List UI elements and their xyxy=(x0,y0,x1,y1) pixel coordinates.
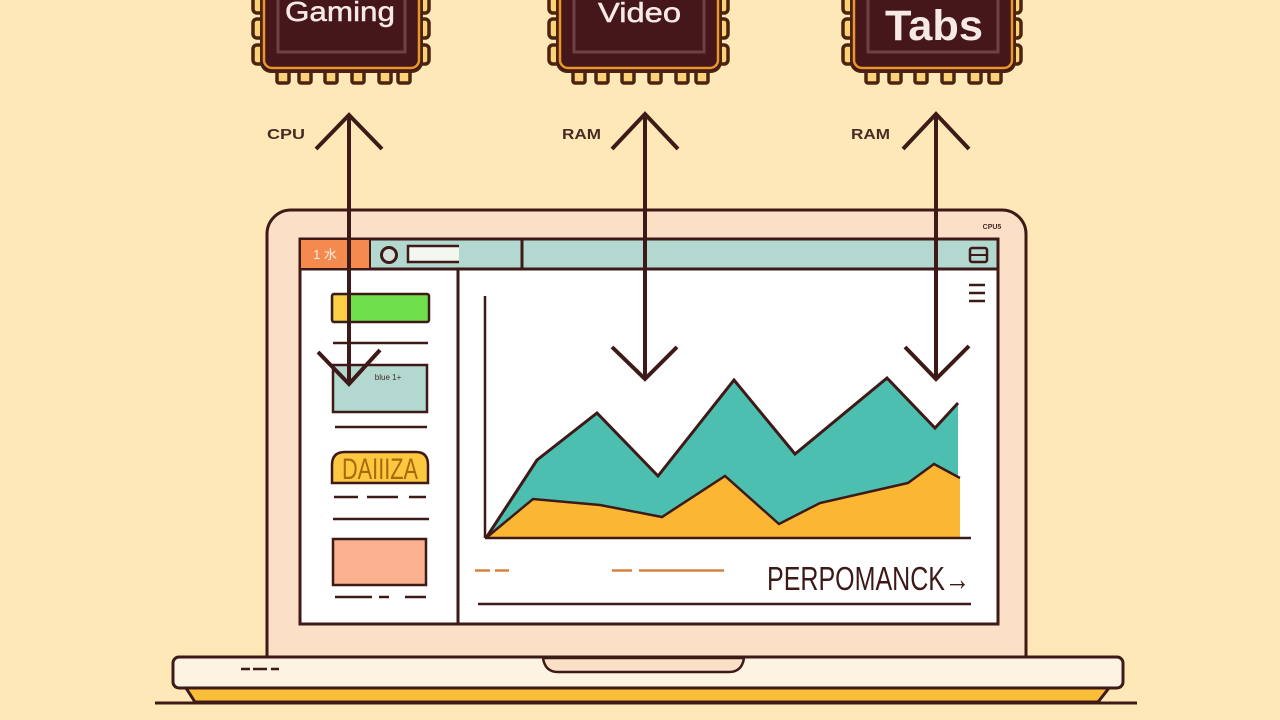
area chart xyxy=(485,296,971,538)
screen xyxy=(300,239,998,624)
browser toolbar xyxy=(300,239,998,269)
chip: Video xyxy=(549,0,728,83)
webcam text: CPU5 xyxy=(983,224,1001,231)
label: RAM left: RAM xyxy=(562,126,601,143)
laptop base xyxy=(155,657,1137,703)
label: CPU: CPU xyxy=(267,126,305,143)
sidebar item: teal: blue 1+ xyxy=(375,373,402,382)
sidebar item: green xyxy=(332,294,429,343)
chip: Tabs xyxy=(843,0,1021,83)
sidebar item: teal xyxy=(333,365,427,427)
chip: Gaming xyxy=(253,0,429,83)
legend dashes xyxy=(475,569,724,572)
sidebar item: yellow xyxy=(332,452,429,519)
menu icon xyxy=(969,285,985,301)
laptop lid xyxy=(267,210,1026,685)
trackpad notch xyxy=(543,658,744,672)
arrow: Tabs RAM xyxy=(903,114,969,379)
sidebar item: salmon xyxy=(333,539,426,597)
arrow: Gaming CPU xyxy=(316,115,382,384)
label: RAM right: RAM xyxy=(851,126,890,143)
label: Tabs: Tabs xyxy=(885,2,983,50)
browser toolbar: 1 水 xyxy=(313,247,337,262)
arrow: Video RAM xyxy=(612,114,678,379)
label: performance: PERPOMANCK→ xyxy=(767,560,970,597)
sidebar divider xyxy=(456,269,460,624)
sidebar item: yellow: DAIIIZA xyxy=(342,453,418,486)
